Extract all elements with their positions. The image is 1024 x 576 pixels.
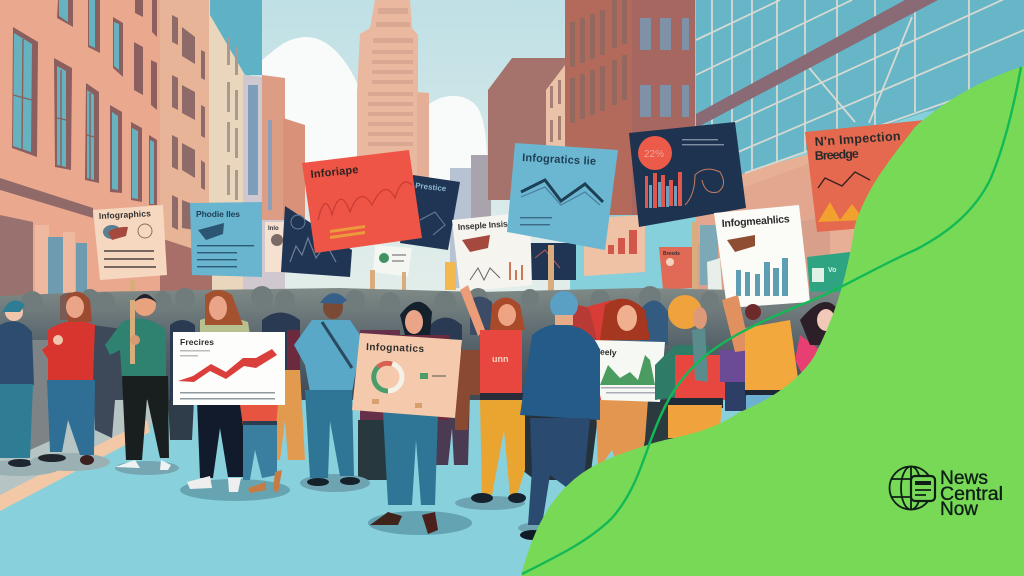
- placard: blue phodie iles: [190, 202, 262, 277]
- placard: green: [807, 252, 850, 296]
- placard: orange breedge: N'n Impection: [814, 129, 901, 149]
- green corner shape: [521, 66, 1024, 576]
- ledge and storefront: [0, 178, 212, 300]
- person: woman with red hair: [568, 299, 650, 470]
- placard: navy bar chart: [629, 122, 746, 227]
- logo: News Central Now: [890, 466, 1003, 520]
- placard: infognatics donut: [352, 333, 462, 418]
- logo text: Now: [940, 499, 978, 520]
- person: left navy hoodie: [0, 300, 60, 476]
- placard: small peach: [265, 222, 286, 272]
- person: child in red: [240, 405, 282, 493]
- person: blue jacket: [294, 293, 370, 492]
- placard: small red: [659, 247, 692, 290]
- placard: white infogmeahlics: [714, 205, 810, 308]
- placard: blue phodie iles: Phodie Iles: [196, 209, 240, 219]
- placard: peach infographics: Infographics: [99, 208, 151, 221]
- placard: navy prestice: Prestice: [415, 181, 447, 193]
- placard: small red: Breeds: [663, 251, 680, 257]
- placard: peach bars: [584, 215, 645, 276]
- placard: navy behind: [529, 243, 576, 280]
- glass office building: [696, 0, 1024, 300]
- placard: navy line chart: [281, 206, 352, 277]
- person: woman in red shirt: [30, 292, 110, 471]
- person: woman with peach placard: [368, 302, 472, 535]
- midground buildings right of tower: [450, 58, 566, 288]
- placard: frecires chart: Frecires: [180, 337, 214, 347]
- logo text: News: [940, 468, 988, 489]
- placard: frecires chart: [173, 332, 285, 405]
- placard: blue infographics line: Infogratics lie: [522, 152, 596, 168]
- person: orange beanie with scarf: [655, 295, 750, 438]
- placard: weekly green chart: Weely: [592, 346, 617, 358]
- brick building: [565, 0, 695, 215]
- placard: red inforiape: [302, 150, 422, 253]
- placard: peach infographics: [93, 205, 167, 280]
- placard: orange breedge: [805, 120, 925, 232]
- person: raised arm in red tank: unn: [492, 354, 508, 364]
- background placards: [93, 120, 925, 342]
- green curve line: [522, 67, 1021, 574]
- placard: white inseple: [452, 212, 532, 292]
- placard: white inseple: Inseple Insis: [457, 219, 508, 232]
- background crowd: [0, 286, 840, 480]
- logo text: Central: [940, 484, 1003, 505]
- placard: navy bar chart: 22%: [644, 149, 664, 160]
- placard: navy prestice: [400, 175, 460, 250]
- placard: white infogmeahlics: Infogmeahlics: [721, 213, 790, 230]
- second building windows: [172, 15, 205, 230]
- left salmon building: [0, 0, 305, 300]
- person: orange shirt: [745, 302, 838, 420]
- placard: red inforiape: Inforiape: [310, 164, 359, 181]
- placard: orange breedge: Breedge: [814, 147, 859, 163]
- placard: small white: [373, 245, 412, 277]
- left building windows: [12, 0, 157, 205]
- street ground: [0, 380, 1024, 576]
- person: woman behind chart placard: [180, 290, 290, 501]
- placard: weekly green chart: [590, 340, 665, 402]
- placard: green: Vo: [828, 267, 836, 274]
- placard: blue infographics line: [507, 143, 618, 250]
- person: green sweater: [105, 294, 179, 475]
- placard poles: [130, 222, 698, 342]
- icon: globe with newspaper: [890, 466, 935, 510]
- person: raised arm in red tank: [455, 285, 526, 510]
- person: blue jacket from behind: [518, 291, 600, 540]
- distant skyscraper: [357, 0, 429, 183]
- placard: infognatics donut: Infognatics: [366, 342, 425, 355]
- sky with clouds: [250, 0, 570, 300]
- placard: small white right: [707, 258, 722, 290]
- placard: small peach: Inlo: [268, 226, 279, 232]
